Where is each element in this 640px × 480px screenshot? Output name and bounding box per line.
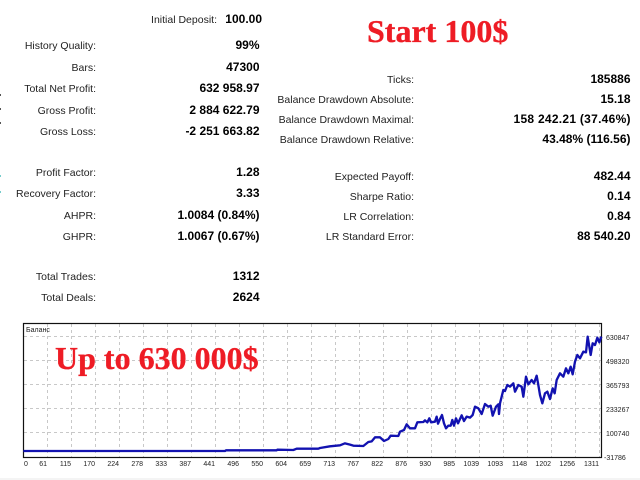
statistics column: left: Total Deals: — [41, 292, 96, 304]
x axis labels: 278 — [131, 461, 143, 468]
y axis labels: 100740 — [606, 431, 629, 438]
statistics column: left: History Quality: — [25, 40, 96, 52]
x axis labels: 170 — [83, 461, 95, 468]
statistics column: right: Balance Drawdown Maximal: — [279, 114, 414, 126]
y axis labels — [604, 335, 629, 462]
statistics column: left: GHPR: — [63, 231, 96, 243]
statistics column: left: Gross Loss: — [40, 126, 96, 138]
statistics column: right: 0.14 — [607, 189, 631, 203]
statistics column: left: 1.0067 (0.67%) — [177, 229, 260, 243]
x axis labels: 1148 — [512, 461, 527, 468]
statistics column: left: AHPR: — [64, 210, 96, 222]
statistics column: left: Gross Profit: — [38, 105, 96, 117]
x axis labels: 115 — [60, 461, 71, 468]
statistics column: right: 185886 — [590, 72, 631, 86]
statistics column: right — [277, 72, 631, 243]
statistics column: left: 2 884 622.79 — [189, 103, 260, 117]
x axis labels: 224 — [107, 461, 119, 468]
statistics column: left: Recovery Factor: — [16, 188, 96, 200]
statistics column: left: Bars: — [71, 62, 96, 74]
statistics column: left: 1.0084 (0.84%) — [177, 208, 260, 222]
statistics column: right: LR Standard Error: — [326, 231, 414, 243]
x axis labels: 496 — [227, 461, 239, 468]
y axis labels: 233267 — [606, 407, 629, 414]
statistics column: right: LR Correlation: — [343, 211, 414, 223]
x axis labels: 1311 — [584, 461, 599, 468]
statistics column: left: 47300 — [226, 60, 260, 74]
statistics column: left: 1.28 — [236, 165, 260, 179]
statistics column: left: 100.00 — [225, 12, 262, 26]
x axis labels: 1202 — [535, 461, 551, 468]
statistics column: right: Ticks: — [387, 74, 414, 86]
x axis labels: 876 — [395, 461, 407, 468]
statistics column: right: Balance Drawdown Absolute: — [277, 94, 414, 106]
statistics column: left: 632 958.97 — [199, 81, 260, 95]
statistics column: left: 3.33 — [236, 186, 260, 200]
x axis labels: 387 — [179, 461, 191, 468]
statistics column: left: Total Trades: — [36, 271, 96, 283]
x axis labels: 61 — [39, 461, 47, 468]
x axis labels: 713 — [323, 461, 335, 468]
statistics column: right: 482.44 — [594, 169, 631, 183]
x axis labels: 441 — [203, 461, 215, 468]
statistics column: left — [16, 12, 262, 304]
statistics column: right: Expected Payoff: — [335, 171, 414, 183]
x axis labels: 1039 — [463, 461, 479, 468]
statistics column: right: Balance Drawdown Relative: — [280, 134, 414, 146]
x axis labels: 985 — [443, 461, 455, 468]
balance line — [23, 337, 601, 451]
x axis labels: 0 — [24, 461, 28, 468]
statistics column: right: 43.48% (116.56) — [542, 132, 630, 146]
statistics column: left: Initial Deposit: — [151, 14, 217, 26]
y axis labels: 498320 — [606, 359, 629, 366]
y axis labels: -31786 — [604, 455, 626, 462]
heading: final amount: Up to 630 000$ — [55, 340, 259, 376]
statistics column: left: Total Net Profit: — [24, 83, 96, 95]
x axis labels: 822 — [371, 461, 383, 468]
x axis labels: 604 — [275, 461, 287, 468]
x axis labels: 930 — [419, 461, 431, 468]
statistics column: left: Profit Factor: — [36, 167, 96, 179]
statistics column: right: Sharpe Ratio: — [350, 191, 414, 203]
statistics column: right: 158 242.21 (37.46%) — [514, 112, 630, 126]
x axis labels: 550 — [251, 461, 263, 468]
statistics column: left: -2 251 663.82 — [185, 124, 260, 138]
balance chart — [23, 324, 629, 468]
y axis labels: 630847 — [606, 335, 629, 342]
x axis labels: 1256 — [559, 461, 575, 468]
y axis labels: 365793 — [606, 383, 629, 390]
chart frame — [24, 324, 602, 458]
statistics column: left: 1312 — [233, 269, 260, 283]
statistics column: right: 88 540.20 — [577, 229, 631, 243]
statistics column: right: 0.84 — [607, 209, 631, 223]
statistics column: right: 15.18 — [600, 92, 631, 106]
x axis labels: 1093 — [487, 461, 503, 468]
statistics column: left: 2624 — [233, 290, 260, 304]
heading: start amount: Start 100$ — [367, 13, 508, 49]
x axis labels: 333 — [155, 461, 167, 468]
x axis labels: 767 — [347, 461, 359, 468]
x axis labels: 659 — [299, 461, 311, 468]
x axis labels — [24, 461, 599, 468]
chart legend label: Баланс — [26, 327, 50, 334]
statistics column: left: 99% — [235, 38, 260, 52]
